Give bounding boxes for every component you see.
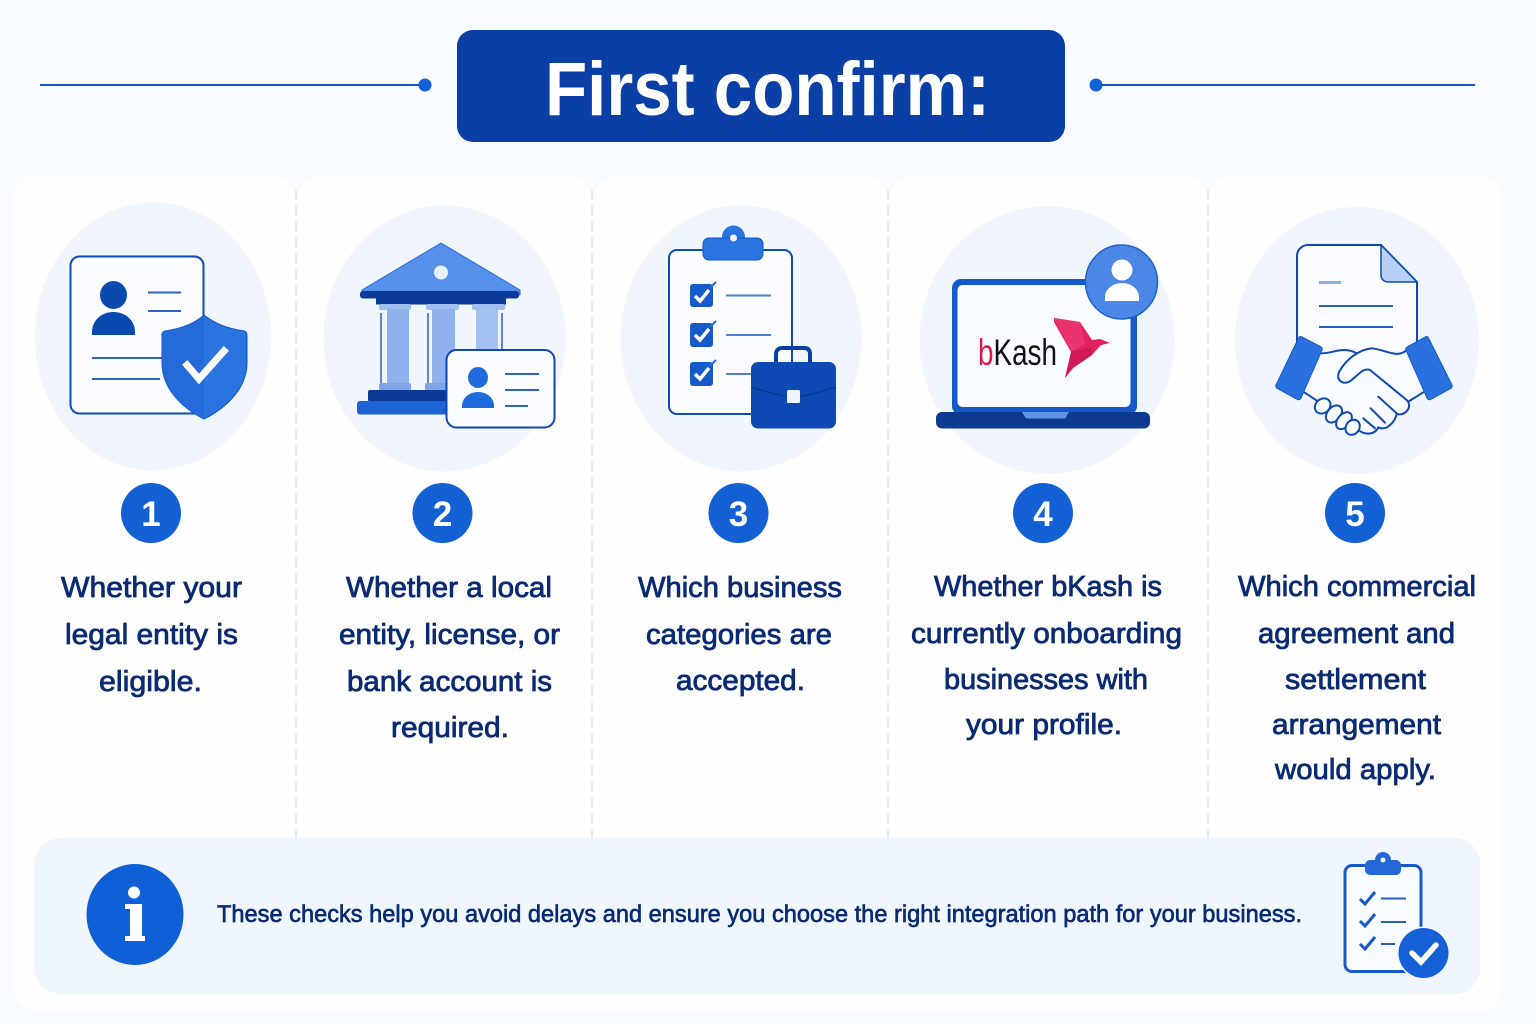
number badge 5 <box>1325 483 1385 543</box>
number badge 5: 5 <box>1345 495 1365 534</box>
panel: footer note <box>34 838 1480 994</box>
icon: info <box>86 864 184 965</box>
text: step 4 <box>911 571 1182 741</box>
text: step 5: arrangement <box>1272 709 1441 741</box>
icon: bank with id card <box>324 206 566 472</box>
icon: checklist with check badge <box>1345 852 1450 980</box>
bKash logo <box>978 318 1110 378</box>
text: step 5: would apply. <box>1274 754 1436 786</box>
bKash logo: bKash <box>978 332 1057 373</box>
number badge 2: 2 <box>433 495 452 534</box>
number badge 3 <box>708 483 768 543</box>
text: step 2: entity, license, or <box>339 619 560 651</box>
text: step 4: your profile. <box>966 709 1122 741</box>
text: step 1 <box>61 572 242 698</box>
icon: clipboard with briefcase <box>620 206 862 472</box>
icon: agreement and handshake <box>1235 207 1479 474</box>
text: step 2: Whether a local <box>346 572 552 604</box>
text: step 3: categories are <box>646 619 832 651</box>
profile badge <box>1086 245 1158 319</box>
text: step 4: businesses with <box>944 664 1148 696</box>
number badge 4 <box>1013 483 1073 543</box>
text: step 2: bank account is <box>347 666 552 698</box>
right header connector <box>1090 78 1475 92</box>
text: step 3 <box>638 572 842 697</box>
left header connector <box>40 78 432 92</box>
text: step 1: Whether your <box>61 572 242 604</box>
panel: step 4 onboarding <box>911 206 1182 741</box>
number badge 1 <box>121 483 181 543</box>
panel: cards background <box>14 175 1502 1011</box>
icon: identity document with shield <box>35 202 271 470</box>
text: step 2 <box>339 572 560 744</box>
panel: step 5 commercial agreement <box>1235 207 1479 786</box>
text: step 5 <box>1238 571 1476 786</box>
number badge 2 <box>412 483 472 543</box>
panel: step 1 legal entity <box>35 202 271 698</box>
text: step 2: required. <box>391 712 509 744</box>
number badge 3: 3 <box>729 495 748 534</box>
number badge 1: 1 <box>141 495 161 534</box>
text: step 5: agreement and <box>1258 618 1455 650</box>
title: First confirm: <box>545 47 990 132</box>
text: step 4: currently onboarding <box>911 618 1182 650</box>
title <box>457 30 1065 142</box>
text: step 1: eligible. <box>99 666 202 698</box>
number badge 4: 4 <box>1033 495 1053 534</box>
text: step 1: legal entity is <box>65 619 238 651</box>
text: step 5: settlement <box>1285 664 1426 696</box>
text: step 5: Which commercial <box>1238 571 1476 603</box>
panel: step 3 business categories <box>620 206 862 697</box>
text: footer note: These checks help you avoid delays and ensure you choose the right integration path for your business. <box>217 901 1302 928</box>
text: step 4: Whether bKash is <box>934 571 1162 603</box>
text: step 3: Which business <box>638 572 842 604</box>
text: step 3: accepted. <box>676 665 805 697</box>
panel: step 2 local entity <box>324 206 566 744</box>
icon: laptop with bKash logo and profile <box>920 206 1174 474</box>
